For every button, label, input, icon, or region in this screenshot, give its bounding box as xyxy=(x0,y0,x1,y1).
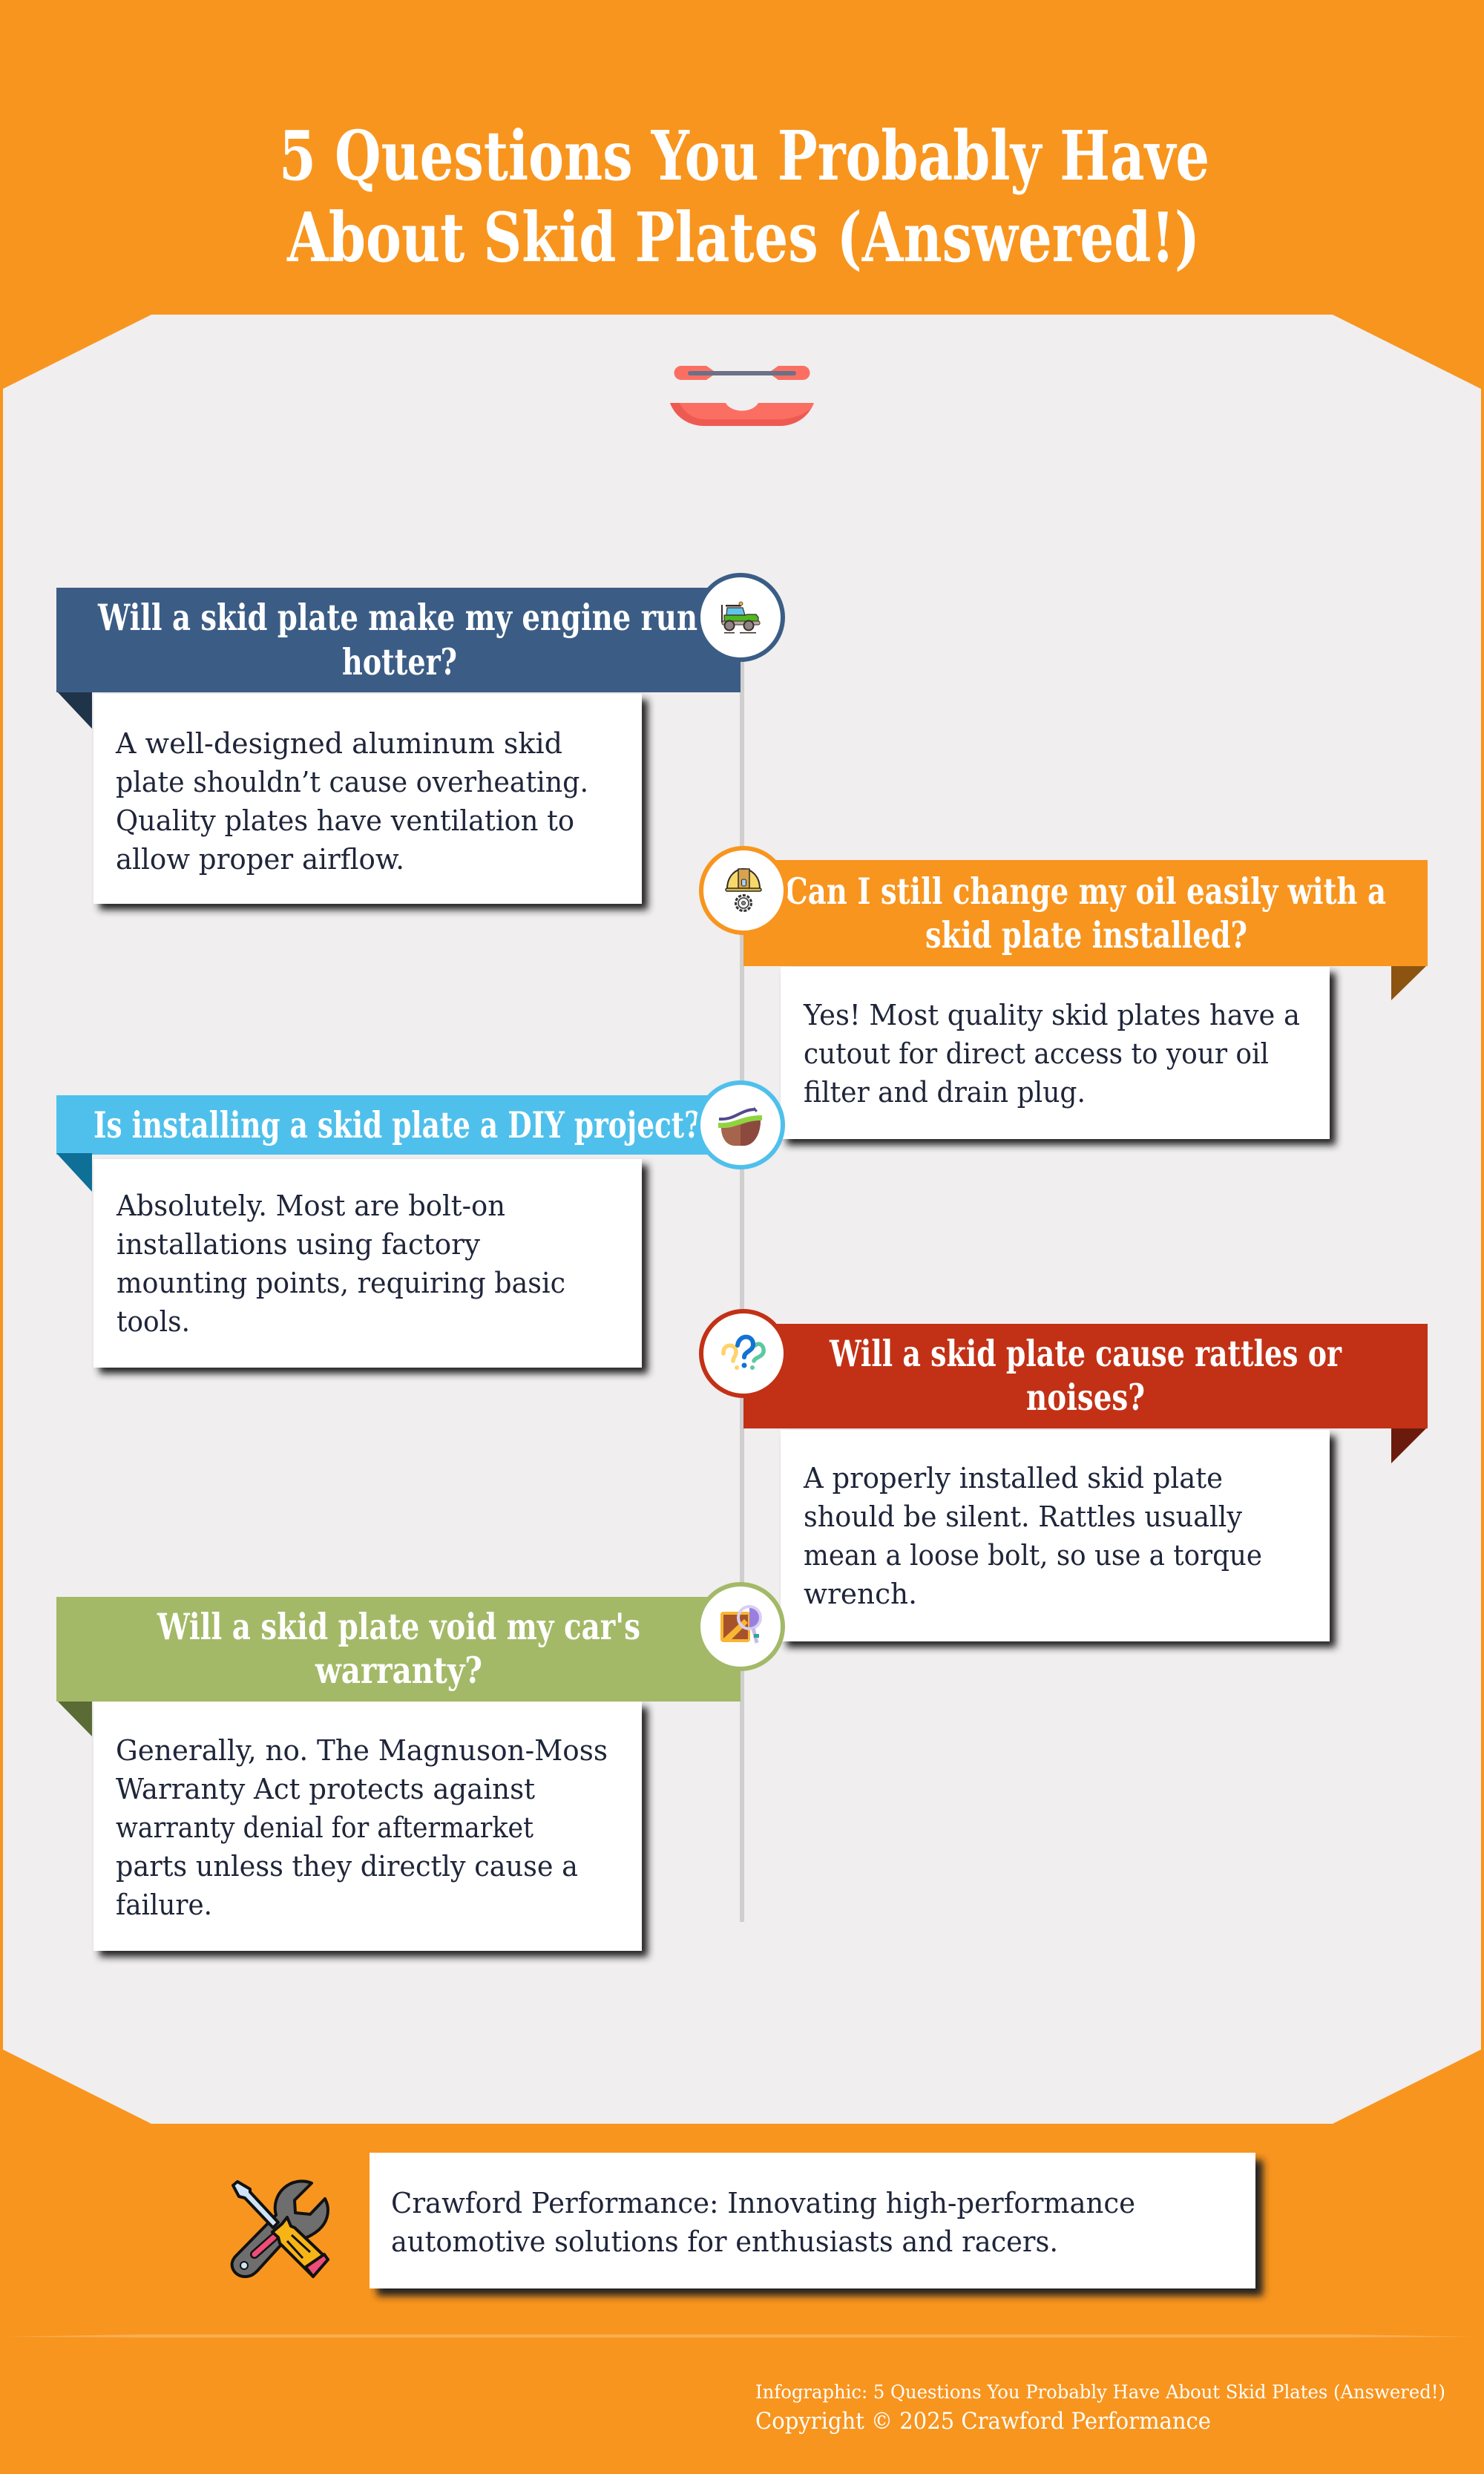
item 1 heading: Will a skid plate make my engine run xyxy=(97,596,697,639)
title: About Skid Plates (Answered!) xyxy=(286,197,1200,278)
item 5 body card: parts unless they directly cause a xyxy=(116,1850,578,1883)
title xyxy=(279,116,1209,278)
item 4 heading: noises? xyxy=(1026,1376,1145,1419)
item 1 body card: allow proper airflow. xyxy=(116,843,404,876)
item 3 ribbon fold xyxy=(56,1153,92,1192)
item 4 ribbon fold xyxy=(1391,1427,1428,1463)
icon: question marks in circle xyxy=(701,1311,786,1396)
item 1 body card: plate shouldn’t cause overheating. xyxy=(116,766,588,798)
item 5 heading: Will a skid plate void my car's xyxy=(157,1605,640,1648)
item 5 body card: failure. xyxy=(116,1889,212,1921)
footer credits xyxy=(755,2381,1445,2435)
item 3 heading xyxy=(56,1095,741,1155)
item 1: engine heat xyxy=(56,575,783,910)
item 4 heading: Will a skid plate cause rattles or xyxy=(829,1332,1342,1375)
item 1 ribbon fold xyxy=(56,691,92,729)
item 2 body card: Yes! Most quality skid plates have a xyxy=(803,999,1300,1031)
footer callout: Crawford Performance: Innovating high-performance xyxy=(391,2187,1135,2219)
item 3 body card xyxy=(93,1159,648,1374)
item 5 heading: warranty? xyxy=(315,1649,482,1692)
item 1 heading xyxy=(56,588,741,692)
icon: crate and magnifier in circle xyxy=(698,1584,783,1669)
timeline line xyxy=(740,617,744,1922)
footer credits: Copyright © 2025 Crawford Performance xyxy=(755,2408,1211,2435)
item 5 body card: Warranty Act protects against xyxy=(116,1773,535,1805)
item 4 body card: mean a loose bolt, so use a torque xyxy=(804,1539,1262,1572)
item 5 body card: warranty denial for aftermarket xyxy=(116,1811,533,1844)
item 2 body card xyxy=(781,967,1336,1145)
icon: crossed wrench and screwdriver xyxy=(232,2181,328,2277)
item 2: oil change xyxy=(701,848,1428,1145)
item 2 body card: filter and drain plug. xyxy=(804,1076,1086,1109)
item 1 heading: hotter? xyxy=(342,640,457,683)
item 5: warranty xyxy=(56,1584,783,1957)
icon: skid plate xyxy=(670,366,814,426)
item 5 ribbon fold xyxy=(56,1700,92,1736)
item 1 body card: A well-designed aluminum skid xyxy=(115,727,562,760)
item 2 heading: skid plate installed? xyxy=(925,913,1247,957)
item 4 body card: A properly installed skid plate xyxy=(803,1462,1223,1494)
item 4 body card: wrench. xyxy=(804,1578,917,1610)
item 5 body card xyxy=(93,1702,648,1957)
footer callout: automotive solutions for enthusiasts and racers. xyxy=(391,2225,1058,2258)
footer callout xyxy=(370,2153,1263,2296)
title: 5 Questions You Probably Have xyxy=(279,116,1209,196)
item 5 body card: Generally, no. The Magnuson-Moss xyxy=(116,1734,608,1767)
central panel xyxy=(3,315,1481,2124)
item 2 ribbon fold xyxy=(1391,965,1428,1000)
item 1 body card: Quality plates have ventilation to xyxy=(116,804,574,837)
icon: soil layers in circle xyxy=(698,1083,783,1167)
item 3 body card: tools. xyxy=(116,1305,190,1338)
icon: helmet and gear in circle xyxy=(701,848,786,933)
item 4 body card: should be silent. Rattles usually xyxy=(804,1500,1243,1533)
footer credits: Infographic: 5 Questions You Probably Have About Skid Plates (Answered!) xyxy=(755,2381,1445,2403)
item 4 body card xyxy=(781,1430,1336,1647)
item 2 body card: cutout for direct access to your oil xyxy=(804,1037,1269,1070)
item 4: rattles xyxy=(701,1311,1428,1647)
icon: jeep in circle xyxy=(698,575,783,660)
item 3: DIY project xyxy=(56,1083,783,1374)
item 3 body card: installations using factory xyxy=(116,1228,481,1261)
item 2 heading xyxy=(743,860,1428,966)
item 1 body card xyxy=(93,694,648,910)
item 3 body card: Absolutely. Most are bolt-on xyxy=(116,1190,505,1222)
item 3 body card: mounting points, requiring basic xyxy=(116,1267,565,1299)
item 4 heading xyxy=(743,1324,1428,1428)
item 5 heading xyxy=(56,1597,741,1702)
item 3 heading: Is installing a skid plate a DIY project? xyxy=(93,1103,700,1146)
